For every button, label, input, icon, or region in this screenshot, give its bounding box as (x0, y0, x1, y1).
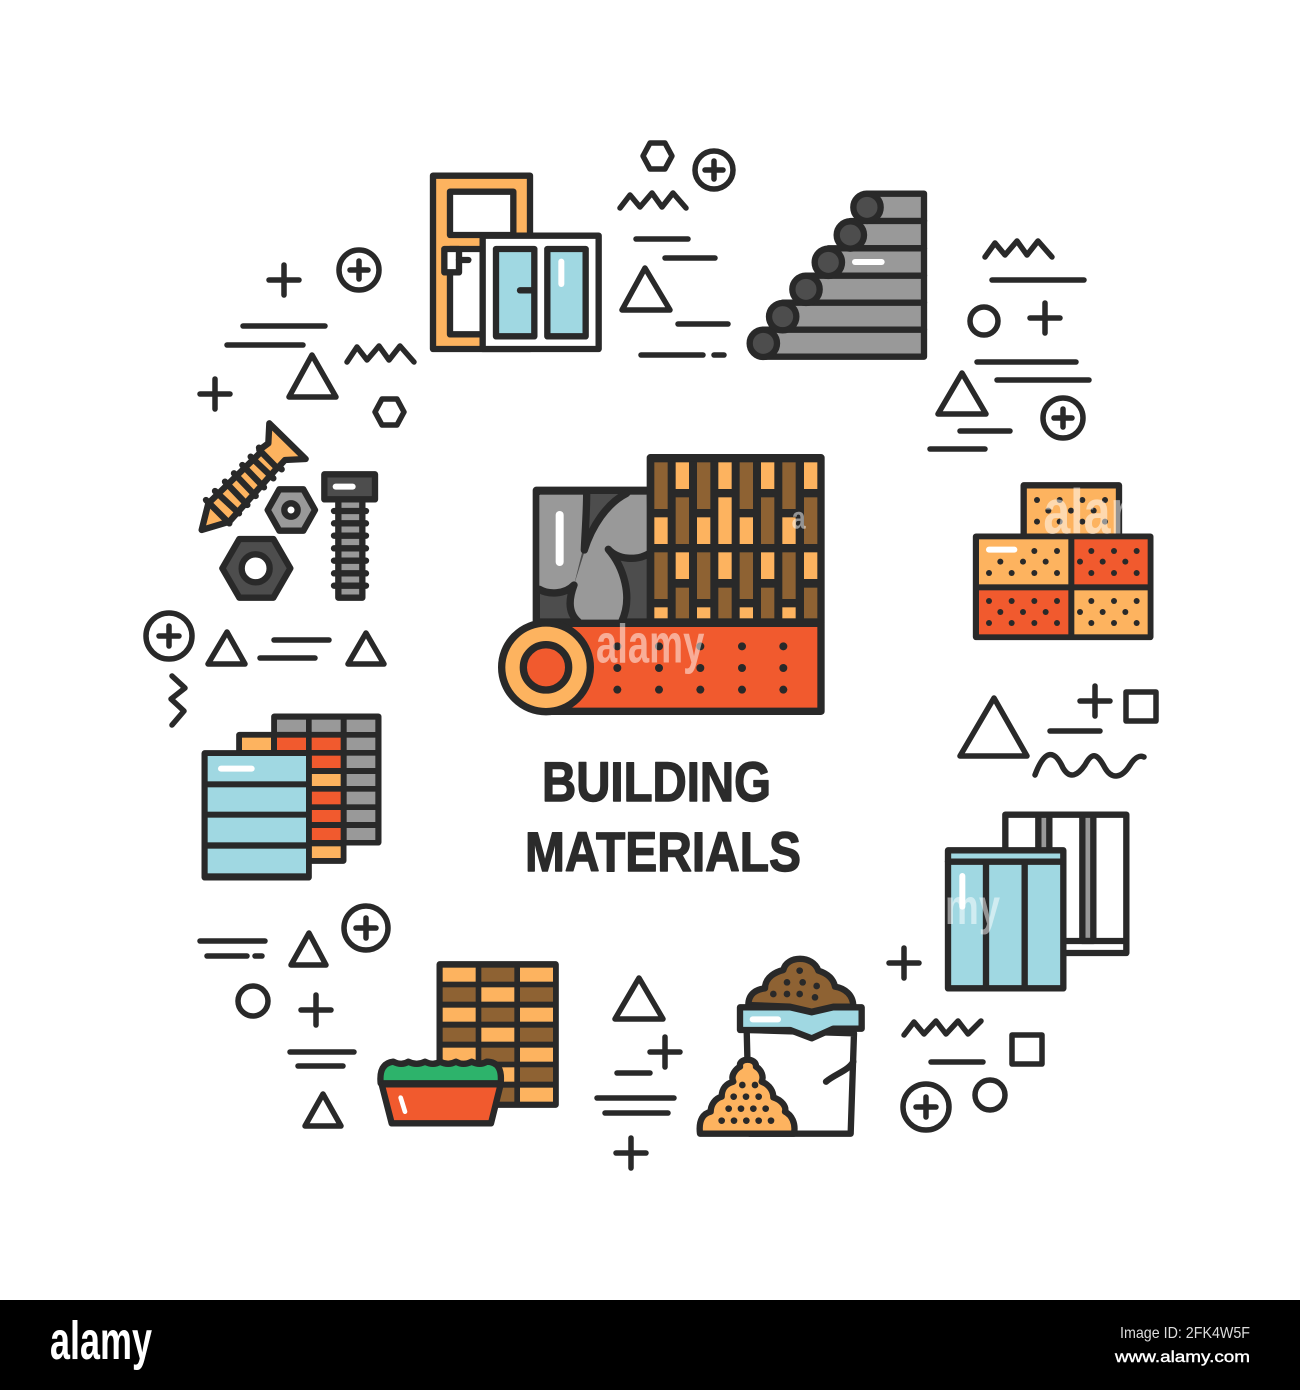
icon: bricks (976, 477, 1153, 637)
wood panel: a (792, 499, 806, 535)
website: www.alamy.com (1114, 1349, 1250, 1366)
screw (202, 423, 306, 530)
small nut (268, 489, 315, 531)
decorative symbols: top right (930, 241, 1089, 449)
icon: glass panels: my (945, 879, 1000, 935)
soil mound (748, 959, 853, 1012)
icon: bricks: alam (1043, 477, 1153, 547)
icon: cladding sample stack (205, 717, 378, 877)
stone panel (536, 490, 651, 622)
decorative symbols: lower middle (597, 978, 680, 1168)
footer bar (0, 1300, 1300, 1390)
footer logo: alamy (50, 1311, 152, 1371)
icon: door and window (433, 176, 599, 349)
sand pile (700, 1060, 794, 1134)
decorative symbols: lower right (889, 948, 1042, 1130)
decorative symbols: top middle (620, 143, 733, 355)
bolt (324, 474, 375, 598)
insulation roll (502, 613, 821, 712)
wood panel (650, 458, 821, 623)
icon: stacked pipes (750, 194, 924, 357)
icon: central materials (stone, wood panel, insulation roll) (502, 458, 821, 712)
insulation roll: alamy (596, 613, 705, 675)
icon: glass panels (945, 815, 1126, 988)
image id: Image ID: 2FK4W5F (1120, 1325, 1250, 1342)
bucket (747, 1030, 854, 1134)
decorative symbols: left (146, 613, 384, 725)
decorative symbols: top left (200, 250, 414, 425)
planter (380, 1062, 501, 1123)
title (525, 750, 801, 883)
title: BUILDING (542, 750, 771, 813)
large nut (222, 539, 290, 598)
title: MATERIALS (525, 820, 801, 883)
bucket rim (740, 1007, 862, 1038)
decorative symbols: lower left (200, 906, 388, 1126)
icon: screw, nuts and bolt (202, 423, 375, 598)
icon: brick pallet and planter (380, 964, 556, 1123)
decorative symbols: right (960, 686, 1156, 776)
icon: soil bucket and sand pile (700, 959, 862, 1134)
